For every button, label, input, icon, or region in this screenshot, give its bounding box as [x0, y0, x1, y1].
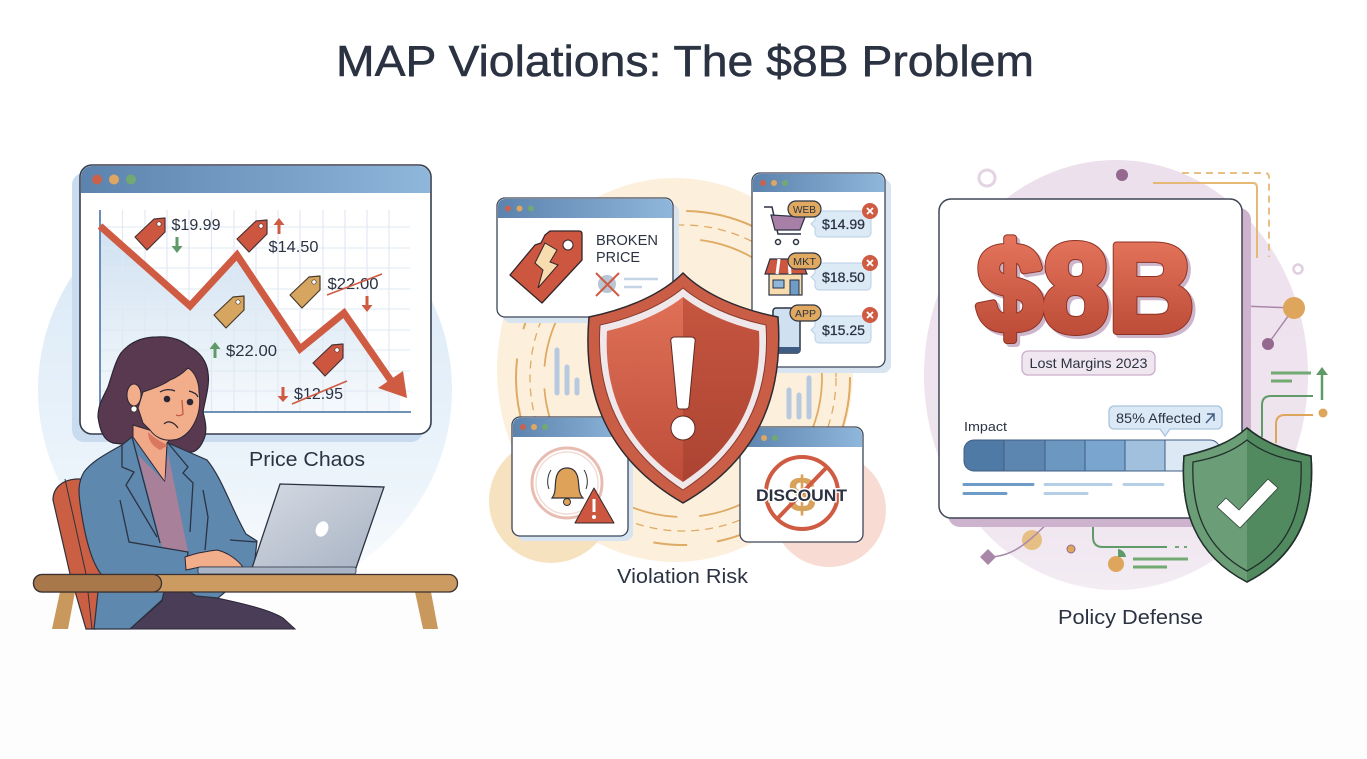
hair	[98, 337, 208, 452]
price bubble: app: $15.25	[822, 323, 865, 338]
green check shield	[1183, 428, 1312, 582]
panel: violation risk	[489, 173, 891, 588]
big number: $8B	[980, 223, 1197, 361]
window: channel prices	[752, 173, 891, 373]
price labels: $22.00	[328, 276, 379, 293]
title: MAP Violations: The $8B Problem	[336, 37, 1034, 86]
blouse	[138, 453, 188, 552]
broken price label: BROKEN	[596, 233, 658, 249]
lost margins pill: Lost Margins 2023	[1030, 355, 1148, 371]
pants	[130, 592, 295, 629]
broken price label: PRICE	[596, 250, 640, 266]
caption: violation risk: Violation Risk	[617, 566, 749, 588]
price tag 5	[313, 344, 343, 376]
window: alert	[512, 417, 633, 541]
check mark	[1217, 479, 1278, 528]
price strike lines	[292, 274, 382, 404]
radiating arcs	[516, 211, 850, 545]
panel: policy defense	[924, 160, 1328, 629]
stat card	[939, 199, 1242, 518]
decorative connectors	[979, 169, 1328, 572]
backdrop blobs	[489, 178, 886, 567]
price bubble: web	[811, 211, 871, 237]
facial features	[160, 390, 198, 428]
badge: app: APP	[795, 308, 816, 320]
legend lines	[964, 484, 1033, 494]
background circle	[38, 183, 452, 597]
panel: price chaos	[34, 165, 458, 629]
woman	[79, 337, 295, 629]
price tag 1	[135, 218, 165, 250]
big number: $8B	[977, 220, 1194, 358]
price tag 4	[214, 296, 244, 328]
broken price label	[596, 233, 658, 266]
impact bar	[964, 440, 1220, 471]
background circle	[924, 160, 1308, 590]
lapels	[120, 437, 257, 570]
window shadow	[72, 173, 423, 442]
badge: app	[790, 305, 821, 321]
price tag 3	[290, 276, 320, 308]
caption: price chaos: Price Chaos	[249, 449, 365, 471]
icon: shopping cart	[764, 207, 805, 244]
line chart	[100, 210, 411, 412]
caption: policy defense: Policy Defense	[1058, 607, 1203, 629]
price direction arrows	[172, 218, 372, 402]
crossed seal	[596, 273, 658, 296]
discount label: DISCOUNT	[756, 486, 848, 505]
price labels: $22.00	[226, 343, 277, 360]
price labels	[172, 217, 379, 403]
small bars left	[557, 350, 577, 393]
badge: mkt: MKT	[793, 256, 817, 268]
desk	[34, 574, 458, 629]
falling trend arrow	[100, 226, 407, 398]
warning shield	[588, 273, 779, 503]
icon: alarm bell	[532, 448, 602, 518]
card shadow	[948, 208, 1251, 527]
affected tooltip	[1109, 406, 1222, 436]
affected tooltip: 85% Affected	[1116, 410, 1201, 426]
icon: broken tag	[510, 231, 582, 303]
icon: no discount symbol: $	[788, 467, 816, 523]
icon: warning triangle	[575, 488, 614, 523]
chair	[53, 479, 108, 629]
jacket	[79, 437, 257, 629]
price bubble: market	[811, 263, 871, 290]
hand on keyboard	[185, 550, 243, 570]
price bubble: market: $18.50	[822, 270, 865, 285]
neck	[133, 425, 172, 482]
laptop	[198, 484, 384, 574]
badge: web: WEB	[793, 204, 816, 216]
price bubble: web: $14.99	[822, 217, 865, 232]
price labels: $19.99	[172, 217, 220, 234]
window: broken price	[497, 198, 679, 323]
icon: storefront	[765, 259, 807, 295]
small bars right	[789, 378, 809, 417]
chart window	[80, 165, 431, 434]
big number: $8B	[977, 220, 1194, 358]
legend lines light	[1045, 484, 1163, 494]
lower background band	[0, 600, 1367, 759]
window: discount	[740, 427, 863, 542]
exclamation mark	[671, 337, 695, 440]
price bubble: app	[811, 316, 871, 343]
face	[138, 368, 200, 440]
lost margins pill	[1022, 351, 1155, 375]
price labels: $12.95	[294, 386, 343, 403]
ear	[127, 384, 141, 406]
badge: web	[788, 201, 821, 217]
error markers	[862, 203, 878, 323]
neck shadow	[148, 432, 167, 450]
price labels: $14.50	[268, 239, 319, 256]
impact label: Impact	[964, 419, 1007, 434]
price tag 2	[237, 220, 267, 252]
earring	[131, 406, 137, 412]
icon: phone	[773, 308, 800, 353]
badge: mkt	[788, 253, 821, 269]
